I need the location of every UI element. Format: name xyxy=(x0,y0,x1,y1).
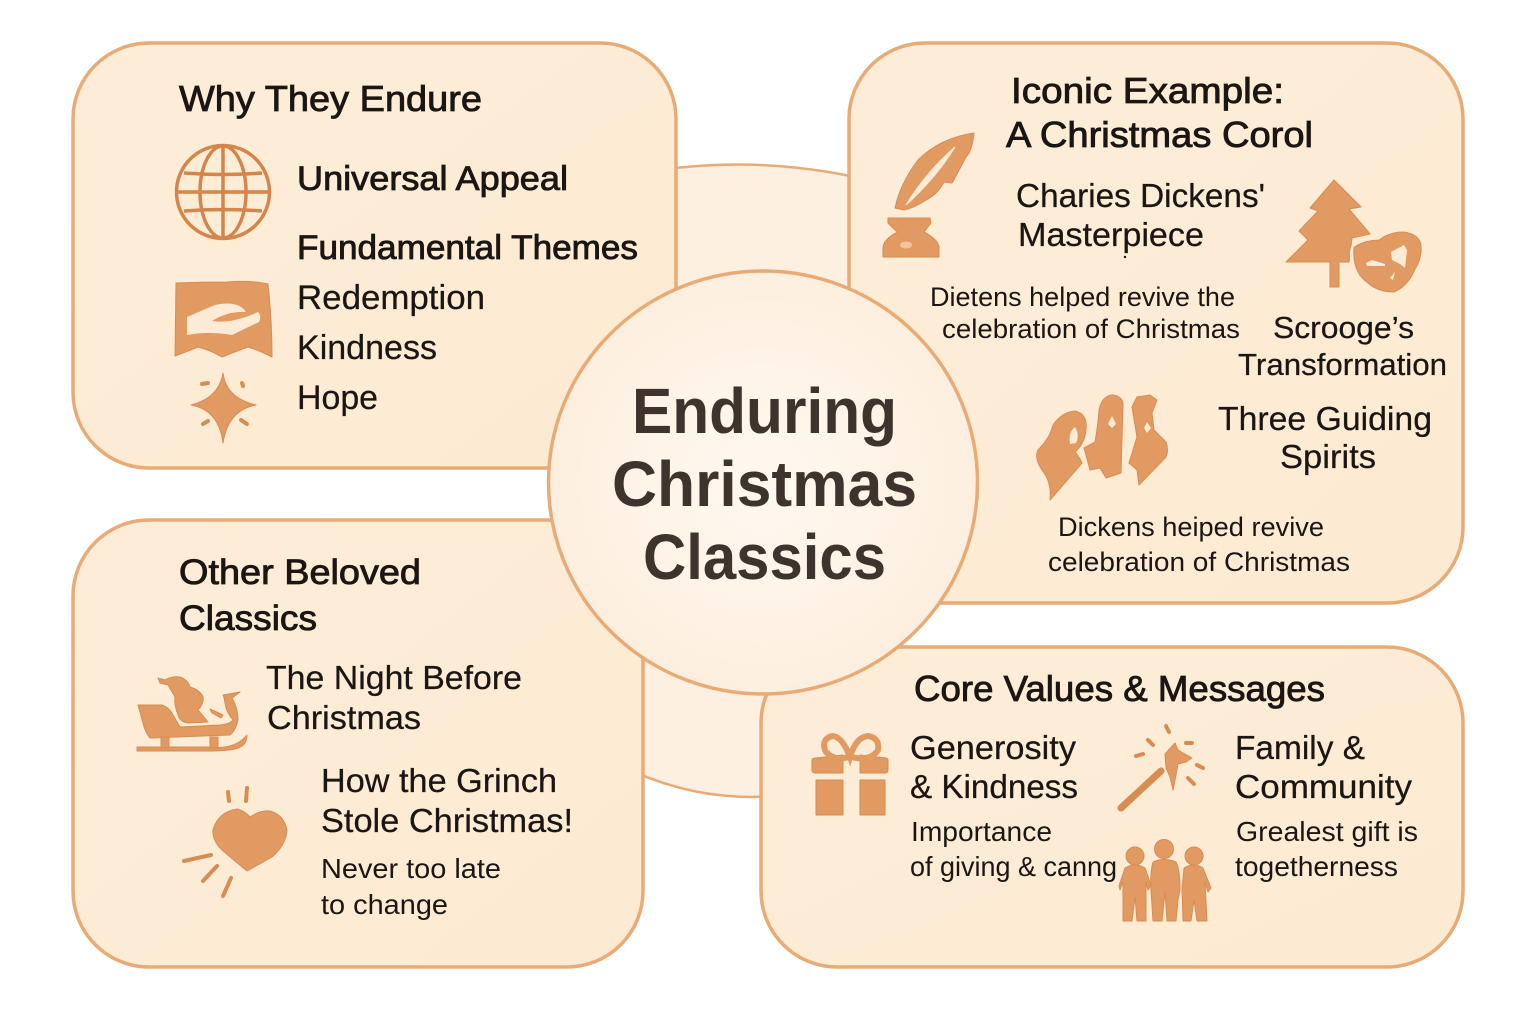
text: importance of giving: Importance xyxy=(911,816,1052,847)
label: how the grinch xyxy=(321,762,573,839)
label: dickens masterpiece xyxy=(1016,177,1265,258)
text: importance of giving xyxy=(910,816,1117,882)
title: Classics xyxy=(643,521,886,593)
label: redemption: Redemption xyxy=(297,279,485,317)
label: how the grinch: Stole Christmas! xyxy=(321,802,573,839)
heading: iconic example xyxy=(1006,70,1313,155)
heading: iconic example: A Christmas Corol xyxy=(1006,114,1313,155)
label: generosity and kindness: & Kindness xyxy=(910,768,1078,805)
text: revive the celebration xyxy=(930,282,1240,344)
heading: other beloved classics xyxy=(179,553,421,638)
label: three guiding spirits xyxy=(1218,400,1432,475)
backdrop: lower connecting arc xyxy=(630,640,775,797)
panel: why they endure xyxy=(73,43,676,468)
icon: heart with rays xyxy=(184,788,287,896)
heading: why they endure: Why They Endure xyxy=(179,78,482,119)
label: the night before christmas: The Night Before xyxy=(266,659,522,696)
label: dickens masterpiece: Charies Dickens' xyxy=(1016,177,1265,214)
label: fundamental themes: Fundamental Themes xyxy=(297,229,638,267)
text: greatest gift: togetherness xyxy=(1235,851,1398,882)
icon: santa sleigh xyxy=(137,677,247,751)
text: revive the celebration: celebration of Christmas xyxy=(942,314,1240,344)
title: Christmas xyxy=(612,448,917,520)
panel: core values and messages xyxy=(761,647,1463,967)
label: hope: Hope xyxy=(297,379,378,417)
label: three guiding spirits: Spirits xyxy=(1280,438,1376,475)
label: family and community: Community xyxy=(1235,768,1413,805)
icon: sparkle star xyxy=(191,373,256,443)
text: importance of giving: of giving & canng xyxy=(910,851,1117,882)
title xyxy=(612,375,917,593)
panel: other beloved classics xyxy=(73,520,643,967)
icon: tree and mask xyxy=(1286,180,1421,292)
icon: hand on book xyxy=(175,281,272,357)
label: scrooge's transformation: Transformation xyxy=(1238,347,1447,382)
label: scrooge's transformation xyxy=(1238,310,1447,382)
text: never too late: Never too late xyxy=(321,853,501,884)
panel: iconic example xyxy=(849,43,1463,603)
text: dickens revive celebration: celebration of Christmas xyxy=(1048,547,1350,577)
text: greatest gift: Grealest gift is xyxy=(1236,816,1418,847)
label: how the grinch: How the Grinch xyxy=(321,762,557,799)
heading: other beloved classics: Other Beloved xyxy=(179,553,421,592)
text: revive the celebration: Dietens helped revive the xyxy=(930,282,1235,312)
icon: three spirits xyxy=(1037,395,1168,500)
label: generosity and kindness xyxy=(910,729,1078,805)
label: the night before christmas: Christmas xyxy=(267,699,421,736)
label: scrooge's transformation: Scrooge’s xyxy=(1273,310,1414,345)
text: dickens revive celebration: Dickens heiped revive xyxy=(1058,512,1324,542)
label: kindness: Kindness xyxy=(297,329,437,367)
label: family and community: Family & xyxy=(1235,729,1365,766)
heading: other beloved classics: Classics xyxy=(179,599,317,638)
label: universal appeal: Universal Appeal xyxy=(297,160,568,198)
text: never too late: to change xyxy=(321,889,448,920)
text: greatest gift xyxy=(1235,816,1418,882)
text: never too late xyxy=(321,853,501,920)
icon: family xyxy=(1119,840,1211,921)
icon: magic wand xyxy=(1121,726,1203,808)
heading: iconic example: Iconic Example: xyxy=(1011,70,1284,111)
label: generosity and kindness: Generosity xyxy=(910,729,1077,766)
label: family and community xyxy=(1235,729,1413,805)
label: dickens masterpiece: Masterpiece xyxy=(1018,216,1204,253)
backdrop: upper connecting arc xyxy=(660,165,860,300)
icon: quill and ink pot xyxy=(883,133,974,257)
text: dickens revive celebration xyxy=(1048,512,1350,577)
label: the night before christmas xyxy=(266,659,522,736)
heading: core values: Core Values & Messages xyxy=(914,668,1325,709)
icon: gift xyxy=(812,736,888,815)
icon: globe xyxy=(176,146,270,238)
center circle with title xyxy=(548,271,978,694)
label: three guiding spirits: Three Guiding xyxy=(1218,400,1432,437)
title: Enduring xyxy=(632,375,897,447)
